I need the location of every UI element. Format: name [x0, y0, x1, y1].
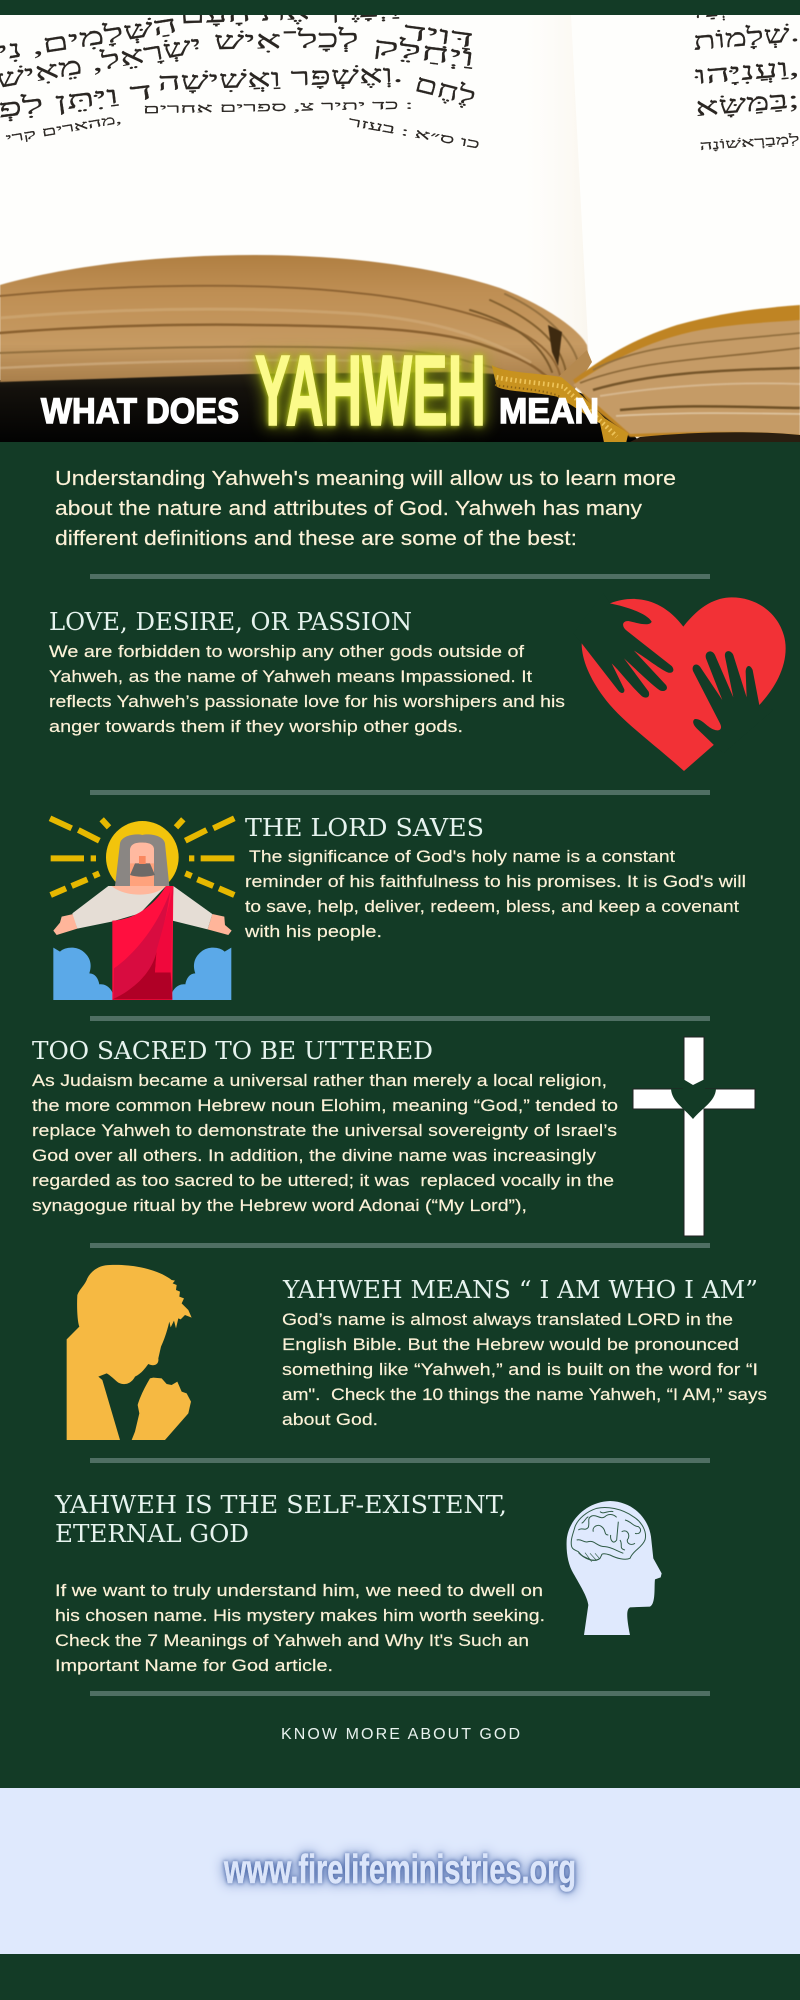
top green strip	[0, 0, 800, 15]
body text: about God.	[282, 1410, 378, 1429]
body text	[282, 1310, 767, 1429]
body text: reflects Yahweh’s passionate love for his worshipers and his	[49, 692, 565, 711]
robe	[112, 886, 173, 1000]
body text: Important Name for God article.	[55, 1656, 333, 1675]
body text	[244, 847, 746, 941]
body text: synagogue ritual by the Hebrew word Adonai (“My Lord”),	[32, 1196, 527, 1215]
call to action: know more about god: KNOW MORE ABOUT GOD	[281, 1726, 520, 1743]
title	[41, 335, 599, 447]
beard	[130, 863, 155, 877]
neck	[112, 886, 166, 895]
heading: ETERNAL GOD	[55, 1520, 249, 1548]
Hebrew text: left page: מהארים קרי,	[4, 111, 122, 146]
Hebrew text: right page: וַעֲנִיָּהוּ,	[693, 54, 800, 90]
title: yahweh glowing: YAHWEH	[255, 335, 486, 447]
body text: God over all others. In addition, the divine name was increasingly	[32, 1146, 597, 1165]
body text	[55, 1581, 545, 1675]
Hebrew text: left page: לֶחֶם	[412, 70, 478, 111]
book pages left	[0, 255, 588, 382]
body text: his chosen name. His mystery makes him worth seeking.	[55, 1606, 545, 1625]
icon: praying man silhouette	[67, 1265, 192, 1440]
body text: We are forbidden to worship any other gods outside of	[49, 642, 524, 661]
Hebrew text: right page: בַּמַּשָּׂא;	[694, 86, 800, 122]
icon: heart with two hands	[573, 593, 786, 771]
hands	[53, 914, 232, 935]
panel: love, desire, or passion	[49, 593, 786, 771]
body text: Check the 7 Meanings of Yahweh and Why It's Such an	[55, 1631, 529, 1650]
Hebrew text: left page: וְאֶשְׁפָּר וַאֲשִׁישָׁה.	[157, 61, 403, 96]
Hebrew text: left page	[0, 0, 481, 152]
intro text: Understanding Yahweh's meaning will allow us to learn more	[55, 467, 676, 490]
book spine junction	[555, 350, 592, 392]
clouds	[53, 948, 114, 1000]
Hebrew text: left page: דָּוִיד	[402, 18, 475, 53]
panel: too sacred to be uttered	[32, 1037, 755, 1236]
footer panel	[0, 1788, 800, 1954]
body text: something like “Yahweh,” and is built on the word for “I	[282, 1360, 758, 1379]
body text: As Judaism became a universal rather than merely a local religion,	[32, 1071, 607, 1090]
hair	[115, 834, 169, 886]
icon: head with brain	[567, 1501, 662, 1635]
title: mean: MEAN	[499, 392, 599, 431]
halo	[106, 821, 179, 894]
face	[130, 843, 154, 886]
book pages right	[573, 305, 800, 437]
Hebrew text: right page: שְׁלָמוֹת.	[692, 20, 800, 56]
rays	[50, 818, 234, 895]
Hebrew text: left page: וַיְחַלֵּק	[371, 33, 476, 72]
heading: THE LORD SAVES	[245, 814, 484, 842]
body text: anger towards them if they worship other gods.	[49, 717, 463, 736]
brain	[571, 1507, 646, 1562]
Hebrew text: right page	[691, 0, 800, 153]
body text	[49, 642, 565, 736]
main green panel top edge	[0, 442, 800, 1788]
Hebrew text: right page: לִמְבַרְאשׁוֹנָה	[699, 131, 800, 153]
Hebrew text: left page: כו ס״א : בעזר	[347, 114, 481, 152]
icon: cross with heart	[633, 1037, 755, 1236]
body text: English Bible. But the Hebrew would be pronounced	[282, 1335, 739, 1354]
gold ribbon	[492, 365, 628, 455]
body text: The significance of God's holy name is a constant	[249, 847, 675, 866]
heading: TOO SACRED TO BE UTTERED	[32, 1037, 433, 1065]
heading	[54, 1491, 507, 1548]
website url: www.firelifeministries.org	[223, 1846, 576, 1892]
heading: YAHWEH MEANS “ I AM WHO I AM”	[282, 1276, 758, 1304]
body text: to save, help, deliver, redeem, bless, and keep a covenant	[245, 897, 739, 916]
body text: reminder of his faithfulness to his promises. It is God's will	[245, 872, 746, 891]
heading: YAHWEH IS THE SELF-EXISTENT,	[54, 1491, 507, 1519]
Hebrew text: left page: כד יתיר צ, ספרים אחרים :	[143, 97, 413, 116]
intro text	[55, 467, 676, 550]
body text: replace Yahweh to demonstrate the universal sovereignty of Israel’s	[32, 1121, 617, 1140]
body text: God’s name is almost always translated LORD in the	[282, 1310, 733, 1329]
body text: If we want to truly understand him, we need to dwell on	[55, 1581, 543, 1600]
body text: am". Check the 10 things the name Yahweh, “I AM,” says	[282, 1385, 767, 1404]
icon: Jesus with halo and clouds	[50, 818, 234, 1000]
sleeves	[72, 886, 166, 929]
panel: yahweh means i am who i am	[67, 1265, 767, 1440]
title: what does: WHAT DOES	[41, 392, 239, 431]
book cover dark band	[0, 366, 640, 442]
Hebrew text: left page: לְכָל־אִישׁ	[214, 26, 359, 55]
panel: the lord saves	[50, 814, 746, 1000]
intro text: different definitions and these are some of the best:	[55, 527, 577, 550]
body text: Yahweh, as the name of Yahweh means Impassioned. It	[49, 667, 532, 686]
body text: regarded as too sacred to be uttered; it was replaced vocally in the	[32, 1171, 614, 1190]
heading: LOVE, DESIRE, OR PASSION	[49, 608, 412, 636]
header photo: open Hebrew book	[0, 0, 800, 455]
body text: the more common Hebrew noun Elohim, meaning “God,” tended to	[32, 1096, 618, 1115]
panel: yahweh is the self-existent, eternal god	[54, 1491, 662, 1675]
intro text: about the nature and attributes of God. Yahweh has many	[55, 497, 643, 520]
body text	[32, 1071, 618, 1215]
body text: with his people.	[244, 922, 382, 941]
